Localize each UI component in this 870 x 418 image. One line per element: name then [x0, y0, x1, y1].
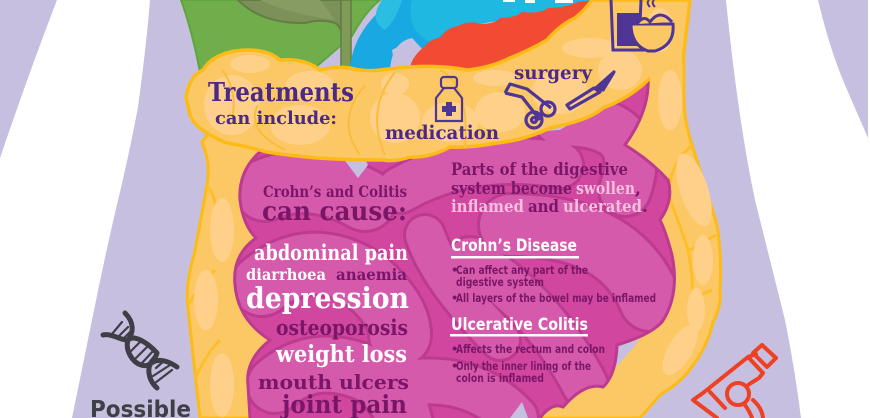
icon: scissors: [505, 84, 555, 128]
lavender gap by lower colon: [490, 340, 640, 418]
stomach: [350, 0, 595, 70]
label: surgery: surgery: [514, 62, 593, 84]
section: Ulcerative Colitis: Affects the rectum and colon: [456, 342, 605, 356]
section: Crohn's Disease: digestive system: [456, 275, 544, 289]
icon: microscope: [693, 345, 776, 418]
section: Ulcerative Colitis: •: [451, 342, 458, 356]
icon: medication bottle: [436, 77, 462, 121]
word cloud: symptoms: diarrhoea: [246, 265, 326, 284]
intro text: swollen: [576, 179, 635, 199]
pancreas: [410, 0, 594, 70]
large intestine: sides and lower colon: [187, 60, 721, 418]
word cloud: symptoms: [246, 182, 409, 418]
section: Crohn's Disease: Crohn’s Disease: [451, 236, 577, 256]
label: medication: medication: [385, 122, 499, 144]
section: Ulcerative Colitis: Ulcerative Colitis: [451, 315, 588, 335]
intro text: and: [528, 197, 559, 217]
section: Ulcerative Colitis: colon is inflamed: [456, 371, 544, 385]
section: Ulcerative Colitis: Only the inner lining of the: [456, 359, 591, 373]
section: Crohn's Disease: •: [451, 291, 458, 305]
heading: treatments: can include:: [215, 108, 337, 129]
intro text: ,: [635, 179, 641, 199]
transverse colon: [186, 0, 690, 161]
word cloud: symptoms: anaemia: [336, 265, 407, 284]
word cloud: symptoms: mouth ulcers: [258, 370, 409, 394]
intro text: system become: [451, 179, 572, 199]
section: Ulcerative Colitis: [450, 315, 605, 385]
section: Crohn's Disease: All layers of the bowel may be inflamed: [456, 291, 656, 305]
icon: scalpel: [567, 72, 614, 109]
intro text: [451, 160, 648, 217]
word cloud: symptoms: Crohn’s and Colitis: [263, 182, 407, 201]
section: Ulcerative Colitis: •: [451, 359, 458, 373]
word cloud: symptoms: abdominal pain: [254, 240, 408, 265]
word cloud: symptoms: weight loss: [275, 341, 407, 368]
heading: treatments: [208, 78, 354, 129]
intro text: ulcerated: [563, 197, 642, 217]
section: Crohn's Disease: •: [451, 263, 458, 277]
icon: DNA helix: [103, 313, 177, 388]
section: Crohn's Disease: Can affect any part of the: [456, 263, 588, 277]
word cloud: symptoms: osteoporosis: [276, 315, 408, 340]
intro text: Parts of the digestive: [451, 160, 628, 180]
intro text: inflamed: [451, 197, 524, 217]
small intestine: [235, 78, 674, 418]
intestinal loops: [262, 120, 650, 418]
intro text: .: [642, 197, 648, 217]
icon: glass and bowl: [611, 0, 673, 51]
word cloud: symptoms: can cause:: [262, 197, 407, 227]
liver: [181, 0, 380, 72]
word cloud: symptoms: depression: [246, 281, 409, 315]
leaf and stem: [238, 0, 351, 70]
section: Crohn's Disease: [451, 236, 656, 305]
heading: treatments: Treatments: [208, 78, 354, 108]
lavender gaps in small intestine: [343, 152, 368, 178]
